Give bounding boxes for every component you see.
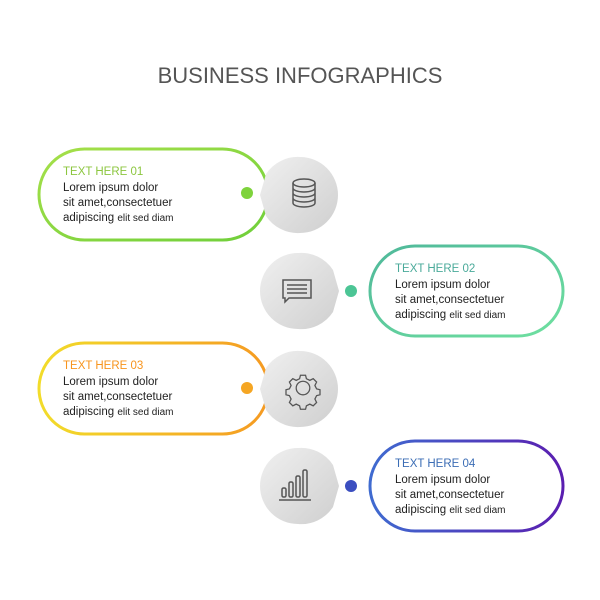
panel: step 03: Lorem ipsum dolor: [63, 376, 158, 388]
panel: step 01: [39, 149, 268, 240]
dot 03: [241, 382, 253, 394]
panel: step 02: sit amet,consectetuer: [395, 294, 504, 306]
panel: step 01: Lorem ipsum dolor: [63, 182, 158, 194]
panel: step 02: [370, 246, 563, 336]
panel: step 03: [39, 343, 268, 434]
dot 02: [345, 285, 357, 297]
panel: step 04: adipiscing elit sed diam: [395, 504, 505, 516]
panel: step 04: sit amet,consectetuer: [395, 489, 504, 501]
panel: step 01: sit amet,consectetuer: [63, 197, 172, 209]
panel: step 02: Lorem ipsum dolor: [395, 279, 490, 291]
panel: step 02: adipiscing elit sed diam: [395, 309, 505, 321]
icon: database: [260, 157, 338, 233]
icon: gear: [260, 351, 338, 427]
panel: step 01: adipiscing elit sed diam: [63, 212, 173, 224]
panel: step 04: TEXT HERE 04: [395, 458, 476, 470]
panel: step 01: TEXT HERE 01: [63, 166, 143, 178]
dot 01: [241, 187, 253, 199]
title: BUSINESS INFOGRAPHICS: [158, 63, 442, 88]
icon: bar chart: [260, 448, 339, 524]
panel: step 03: adipiscing elit sed diam: [63, 406, 173, 418]
dot 04: [345, 480, 357, 492]
panel: step 03: sit amet,consectetuer: [63, 391, 172, 403]
panel: step 04: [370, 441, 563, 531]
panel: step 04: Lorem ipsum dolor: [395, 474, 490, 486]
panel: step 03: TEXT HERE 03: [63, 360, 143, 372]
panel: step 02: TEXT HERE 02: [395, 263, 475, 275]
icon: chat: [260, 253, 339, 329]
